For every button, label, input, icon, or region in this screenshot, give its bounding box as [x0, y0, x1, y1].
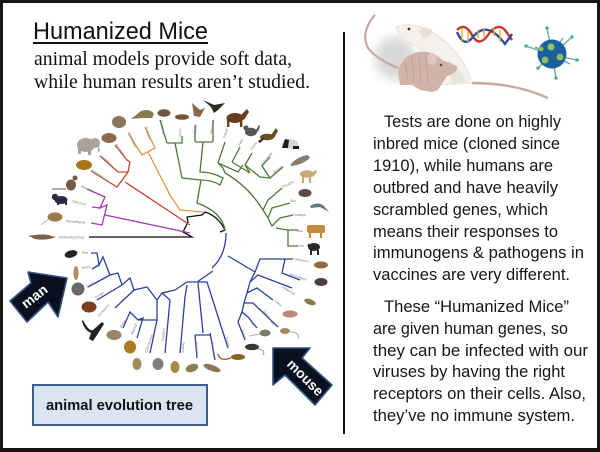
arrow: man: man — [18, 281, 51, 311]
text block: humanized mice: These “Humanized Mice” — [384, 298, 569, 316]
icon: small bat — [192, 103, 205, 117]
species labels: Ovis — [297, 244, 304, 248]
arrow: man — [10, 272, 67, 322]
icon: dasyurus — [52, 194, 68, 205]
icon: hedgehog — [158, 109, 170, 117]
icon: vervet — [132, 358, 142, 370]
icon: kangaroo rat — [280, 328, 298, 339]
text block: inbred vs outbred: scrambled genes, which — [373, 201, 548, 219]
icon: mouse — [249, 330, 270, 336]
icon: tenrec — [76, 160, 92, 170]
species labels: Sus — [290, 199, 296, 203]
icon: hyrax — [102, 133, 116, 143]
species labels: Monodelphis — [66, 219, 86, 225]
species labels: Papio — [119, 319, 127, 328]
icon: platypus — [28, 234, 56, 240]
text block: humanized mice: they’ve no immune system. — [373, 407, 575, 425]
species labels: Mus — [249, 320, 256, 328]
icon: opossum — [41, 212, 62, 225]
cast shadow — [375, 36, 415, 80]
species labels: Erinaceus — [159, 119, 166, 135]
species labels: Echinops — [90, 168, 105, 179]
species labels: Macaca — [130, 323, 138, 335]
species labels: Ailuropoda — [260, 152, 273, 167]
species labels: Rattus — [240, 329, 247, 340]
species labels: Dasyurus — [72, 199, 87, 207]
icon: ferret — [290, 155, 310, 166]
text block: inbred vs outbred: inbred mice (cloned since — [373, 135, 560, 153]
icon: lemur — [203, 362, 221, 374]
text block: inbred vs outbred: outbred and have heavily — [373, 179, 559, 197]
species labels: Oryctolagus — [289, 272, 307, 282]
right tail — [472, 83, 548, 98]
species labels: Sorex — [178, 128, 182, 137]
species labels: Mustela — [272, 164, 284, 175]
species labels: Tupaia — [224, 336, 231, 347]
branches: orange — [128, 127, 203, 212]
callout: animal evolution tree — [33, 385, 207, 425]
icon: marmoset — [152, 358, 164, 370]
species labels — [58, 119, 309, 359]
arrow: mouse — [273, 348, 332, 405]
icon: flying fox — [203, 100, 225, 113]
species labels: Pongo — [94, 291, 105, 300]
species labels: Otolemur — [194, 342, 199, 357]
text block: inbred vs outbred: Tests are done on highly — [384, 113, 562, 131]
icon: sloth — [112, 116, 126, 128]
species labels: Equus — [222, 128, 229, 138]
subtitle — [34, 49, 310, 93]
text block: humanized mice — [373, 298, 589, 425]
icon: guinea pig — [282, 310, 298, 318]
icon: pig — [298, 189, 312, 197]
icon: DNA helix — [457, 27, 512, 44]
icon: wallaby — [52, 176, 78, 190]
icon: orangutan — [82, 302, 96, 312]
species labels: Procavia — [114, 143, 126, 156]
icon: sheep — [307, 243, 320, 255]
species labels: Felis — [237, 138, 244, 146]
species labels: Pteropus — [209, 120, 215, 134]
icon: gorilla — [72, 282, 84, 296]
icon: shrew — [175, 114, 189, 120]
text block: inbred vs outbred: immunogens & pathogens in — [373, 244, 584, 262]
text block: humanized mice: viruses by having the right — [373, 363, 565, 381]
species labels: Pan — [82, 251, 88, 255]
image: two mice — [365, 15, 548, 98]
icon: dog — [258, 128, 278, 143]
icon: cow — [307, 225, 325, 238]
icon: vicuna — [300, 170, 317, 183]
icon: squirrel — [303, 297, 317, 307]
species labels: Homo — [82, 265, 91, 270]
icon: armadillo — [131, 110, 154, 119]
text block: humanized mice: are given human genes, so — [373, 320, 568, 338]
text block: inbred vs outbred: vaccines are very different. — [373, 266, 570, 284]
branches: black root — [89, 212, 225, 237]
species labels: Ochotona — [294, 257, 309, 264]
white mouse — [396, 25, 471, 85]
species labels: Dasypus — [144, 126, 152, 140]
subtitle: while human results aren’t studied. — [34, 72, 310, 93]
branches: purple — [87, 189, 190, 233]
icon: tarsier — [170, 361, 180, 373]
branches: green — [160, 120, 298, 246]
icon: gibbon — [82, 320, 104, 341]
icon: baboon — [106, 330, 122, 340]
icon: human — [73, 266, 79, 280]
species labels: Choloepus — [127, 132, 138, 148]
text block: inbred vs outbred — [373, 113, 584, 284]
species labels: Tarsius — [181, 342, 185, 353]
text block: inbred vs outbred: means their responses to — [373, 223, 558, 241]
species labels: Callithrix — [161, 327, 166, 341]
species labels: Dipodomys — [262, 309, 275, 326]
left tail — [365, 15, 398, 68]
icon: panda — [282, 139, 299, 149]
nude mouse — [398, 52, 457, 92]
icon: elephant — [77, 138, 100, 155]
arrow: mouse: mouse — [284, 356, 327, 399]
species labels: Macropus — [81, 184, 96, 194]
species labels: Gorilla — [86, 281, 96, 289]
text block: humanized mice: receptors on their cells. Also, — [373, 385, 586, 403]
species labels: Cavia — [273, 299, 283, 307]
icon: pika — [314, 262, 328, 268]
divider line — [343, 32, 345, 434]
icon: chimpanzee — [64, 249, 78, 259]
species labels: Ictidomys — [282, 285, 296, 296]
text block: humanized mice: they can be infected with our — [373, 342, 589, 360]
icon: cat — [243, 125, 260, 136]
callout: animal evolution tree: animal evolution tree — [46, 398, 193, 414]
species labels: Bos — [297, 229, 303, 233]
icon: virus — [524, 26, 579, 80]
species labels: Myotis — [193, 124, 198, 134]
species labels: Vicugna — [282, 180, 294, 189]
branches: red — [91, 145, 190, 225]
icon: macaque — [124, 340, 136, 354]
species labels: Nomascus — [97, 303, 111, 318]
icon: horse — [226, 109, 249, 127]
species labels: Microcebus — [210, 341, 216, 359]
evolution tree branches — [87, 120, 300, 360]
branches: blue — [88, 233, 300, 360]
species labels: Canis — [250, 141, 258, 151]
icon: rabbit — [314, 278, 328, 286]
species labels: Tursiops — [293, 213, 306, 217]
icon: dolphin — [310, 204, 329, 212]
title: Humanized Mice — [33, 18, 208, 45]
animal icons — [28, 100, 329, 374]
species labels: Loxodonta — [99, 154, 114, 167]
icon: bushbaby — [185, 362, 199, 374]
text block: inbred vs outbred: 1910), while humans are — [373, 157, 553, 175]
icon: rat — [245, 344, 264, 355]
species labels: Chlorocebus — [144, 334, 154, 353]
icon: tree shrew — [218, 354, 245, 360]
subtitle: animal models provide soft data, — [34, 49, 292, 70]
species labels: Ornithorhynchus — [58, 236, 85, 240]
